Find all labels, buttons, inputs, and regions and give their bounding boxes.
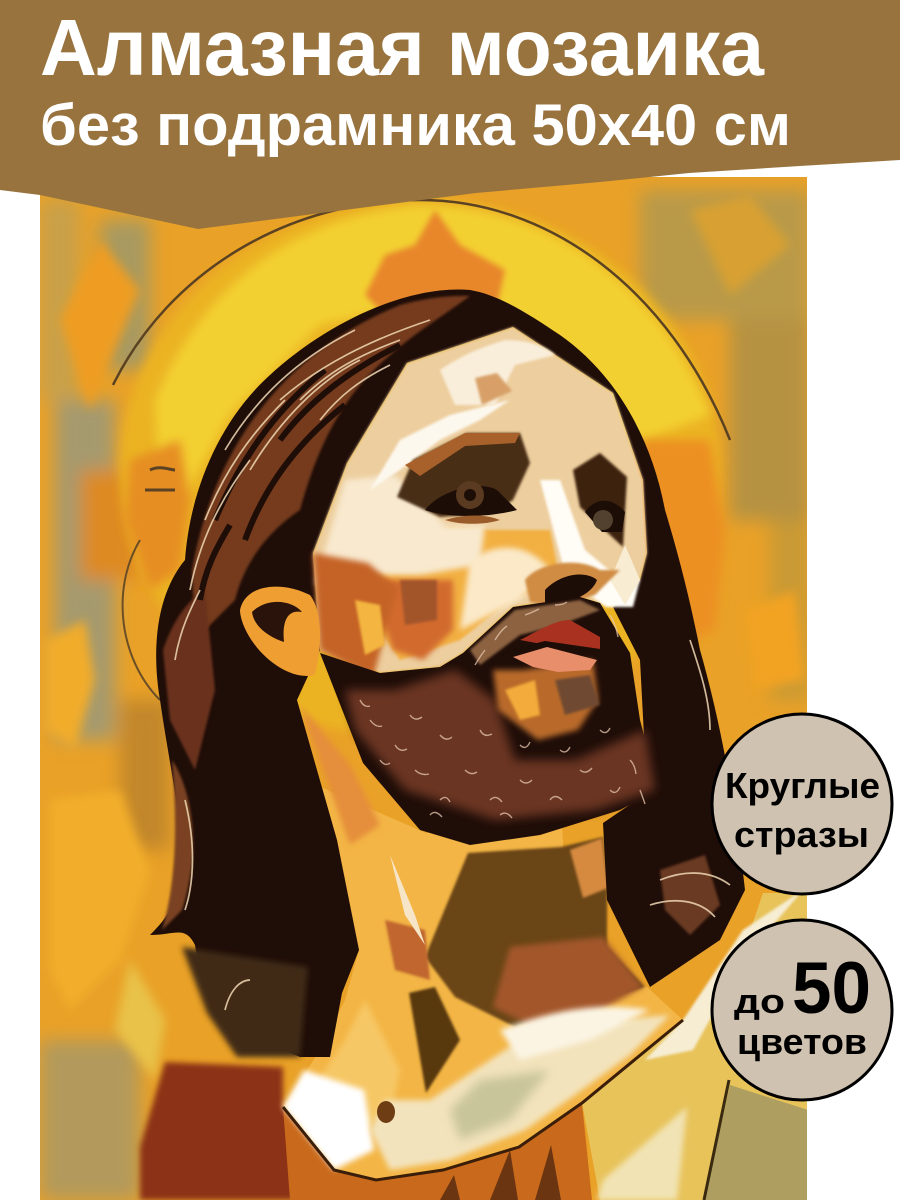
hair (150, 290, 745, 1057)
badge: up to 50 colours: до (734, 983, 785, 1021)
face (313, 327, 647, 678)
badge: up to 50 colours (712, 920, 892, 1100)
ear (240, 587, 320, 676)
beard (320, 597, 658, 845)
painting: portrait (40, 177, 810, 1200)
eyes (397, 433, 627, 547)
nose (525, 563, 620, 607)
badge: round rhinestones (712, 714, 892, 894)
title: Алмазная мозаика (40, 3, 764, 92)
banner (0, 0, 900, 229)
badge: round rhinestones: Круглые (725, 765, 880, 806)
neck and chest (266, 700, 683, 1180)
badge: round rhinestones: стразы (734, 814, 869, 855)
halo (113, 200, 730, 740)
badge: up to 50 colours: 50 (792, 948, 871, 1029)
badge: up to 50 colours: цветов (737, 1021, 867, 1062)
subtitle: без подрамника 50х40 см (40, 93, 791, 158)
painting background (40, 177, 810, 1200)
garment (140, 890, 808, 1200)
